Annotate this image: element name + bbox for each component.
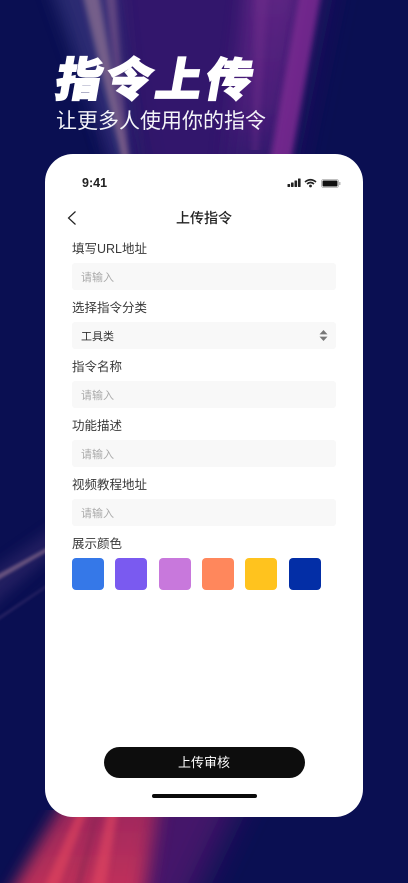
input: video tutorial: 请输入 bbox=[81, 508, 114, 520]
input: description: 请输入 bbox=[81, 449, 114, 461]
label: display color: 展示颜色 bbox=[72, 537, 122, 551]
swatch: blue bbox=[72, 558, 104, 590]
screen heading: 上传指令 bbox=[176, 210, 232, 226]
swatch: amber bbox=[245, 558, 277, 590]
home indicator bbox=[152, 794, 256, 798]
left streak bbox=[0, 530, 50, 600]
icon: back arrow bbox=[68, 211, 76, 225]
label: video tutorial: 视频教程地址 bbox=[72, 478, 147, 492]
select: category: 工具类 bbox=[81, 331, 114, 343]
label: description: 功能描述 bbox=[72, 419, 122, 433]
icon: select arrows bbox=[320, 330, 328, 341]
input: URL bbox=[72, 263, 336, 290]
icon: status indicators bbox=[288, 178, 340, 188]
bottom glow bbox=[90, 810, 235, 883]
select: category bbox=[72, 322, 336, 349]
label: category: 选择指令分类 bbox=[72, 301, 147, 315]
swatch: navy bbox=[288, 558, 320, 590]
label: name: 指令名称 bbox=[72, 360, 122, 374]
input: video tutorial bbox=[72, 499, 336, 526]
swatch: coral bbox=[202, 558, 234, 590]
panel: phone screen bbox=[45, 154, 363, 817]
status bar time: 9:41 bbox=[82, 176, 107, 190]
title: 指令上传 bbox=[51, 44, 263, 110]
input: description bbox=[72, 440, 336, 467]
input: URL: 请输入 bbox=[81, 272, 114, 284]
button: submit for review bbox=[104, 746, 304, 778]
top haze bbox=[95, 0, 320, 170]
input: name bbox=[72, 381, 336, 408]
swatch: violet bbox=[115, 558, 147, 590]
input: name: 请输入 bbox=[81, 390, 114, 402]
subtitle: 让更多人使用你的指令 bbox=[56, 110, 266, 133]
button: submit for review: 上传审核 bbox=[178, 754, 230, 770]
swatch: orchid bbox=[158, 558, 190, 590]
label: URL: 填写URL地址 bbox=[72, 242, 147, 256]
